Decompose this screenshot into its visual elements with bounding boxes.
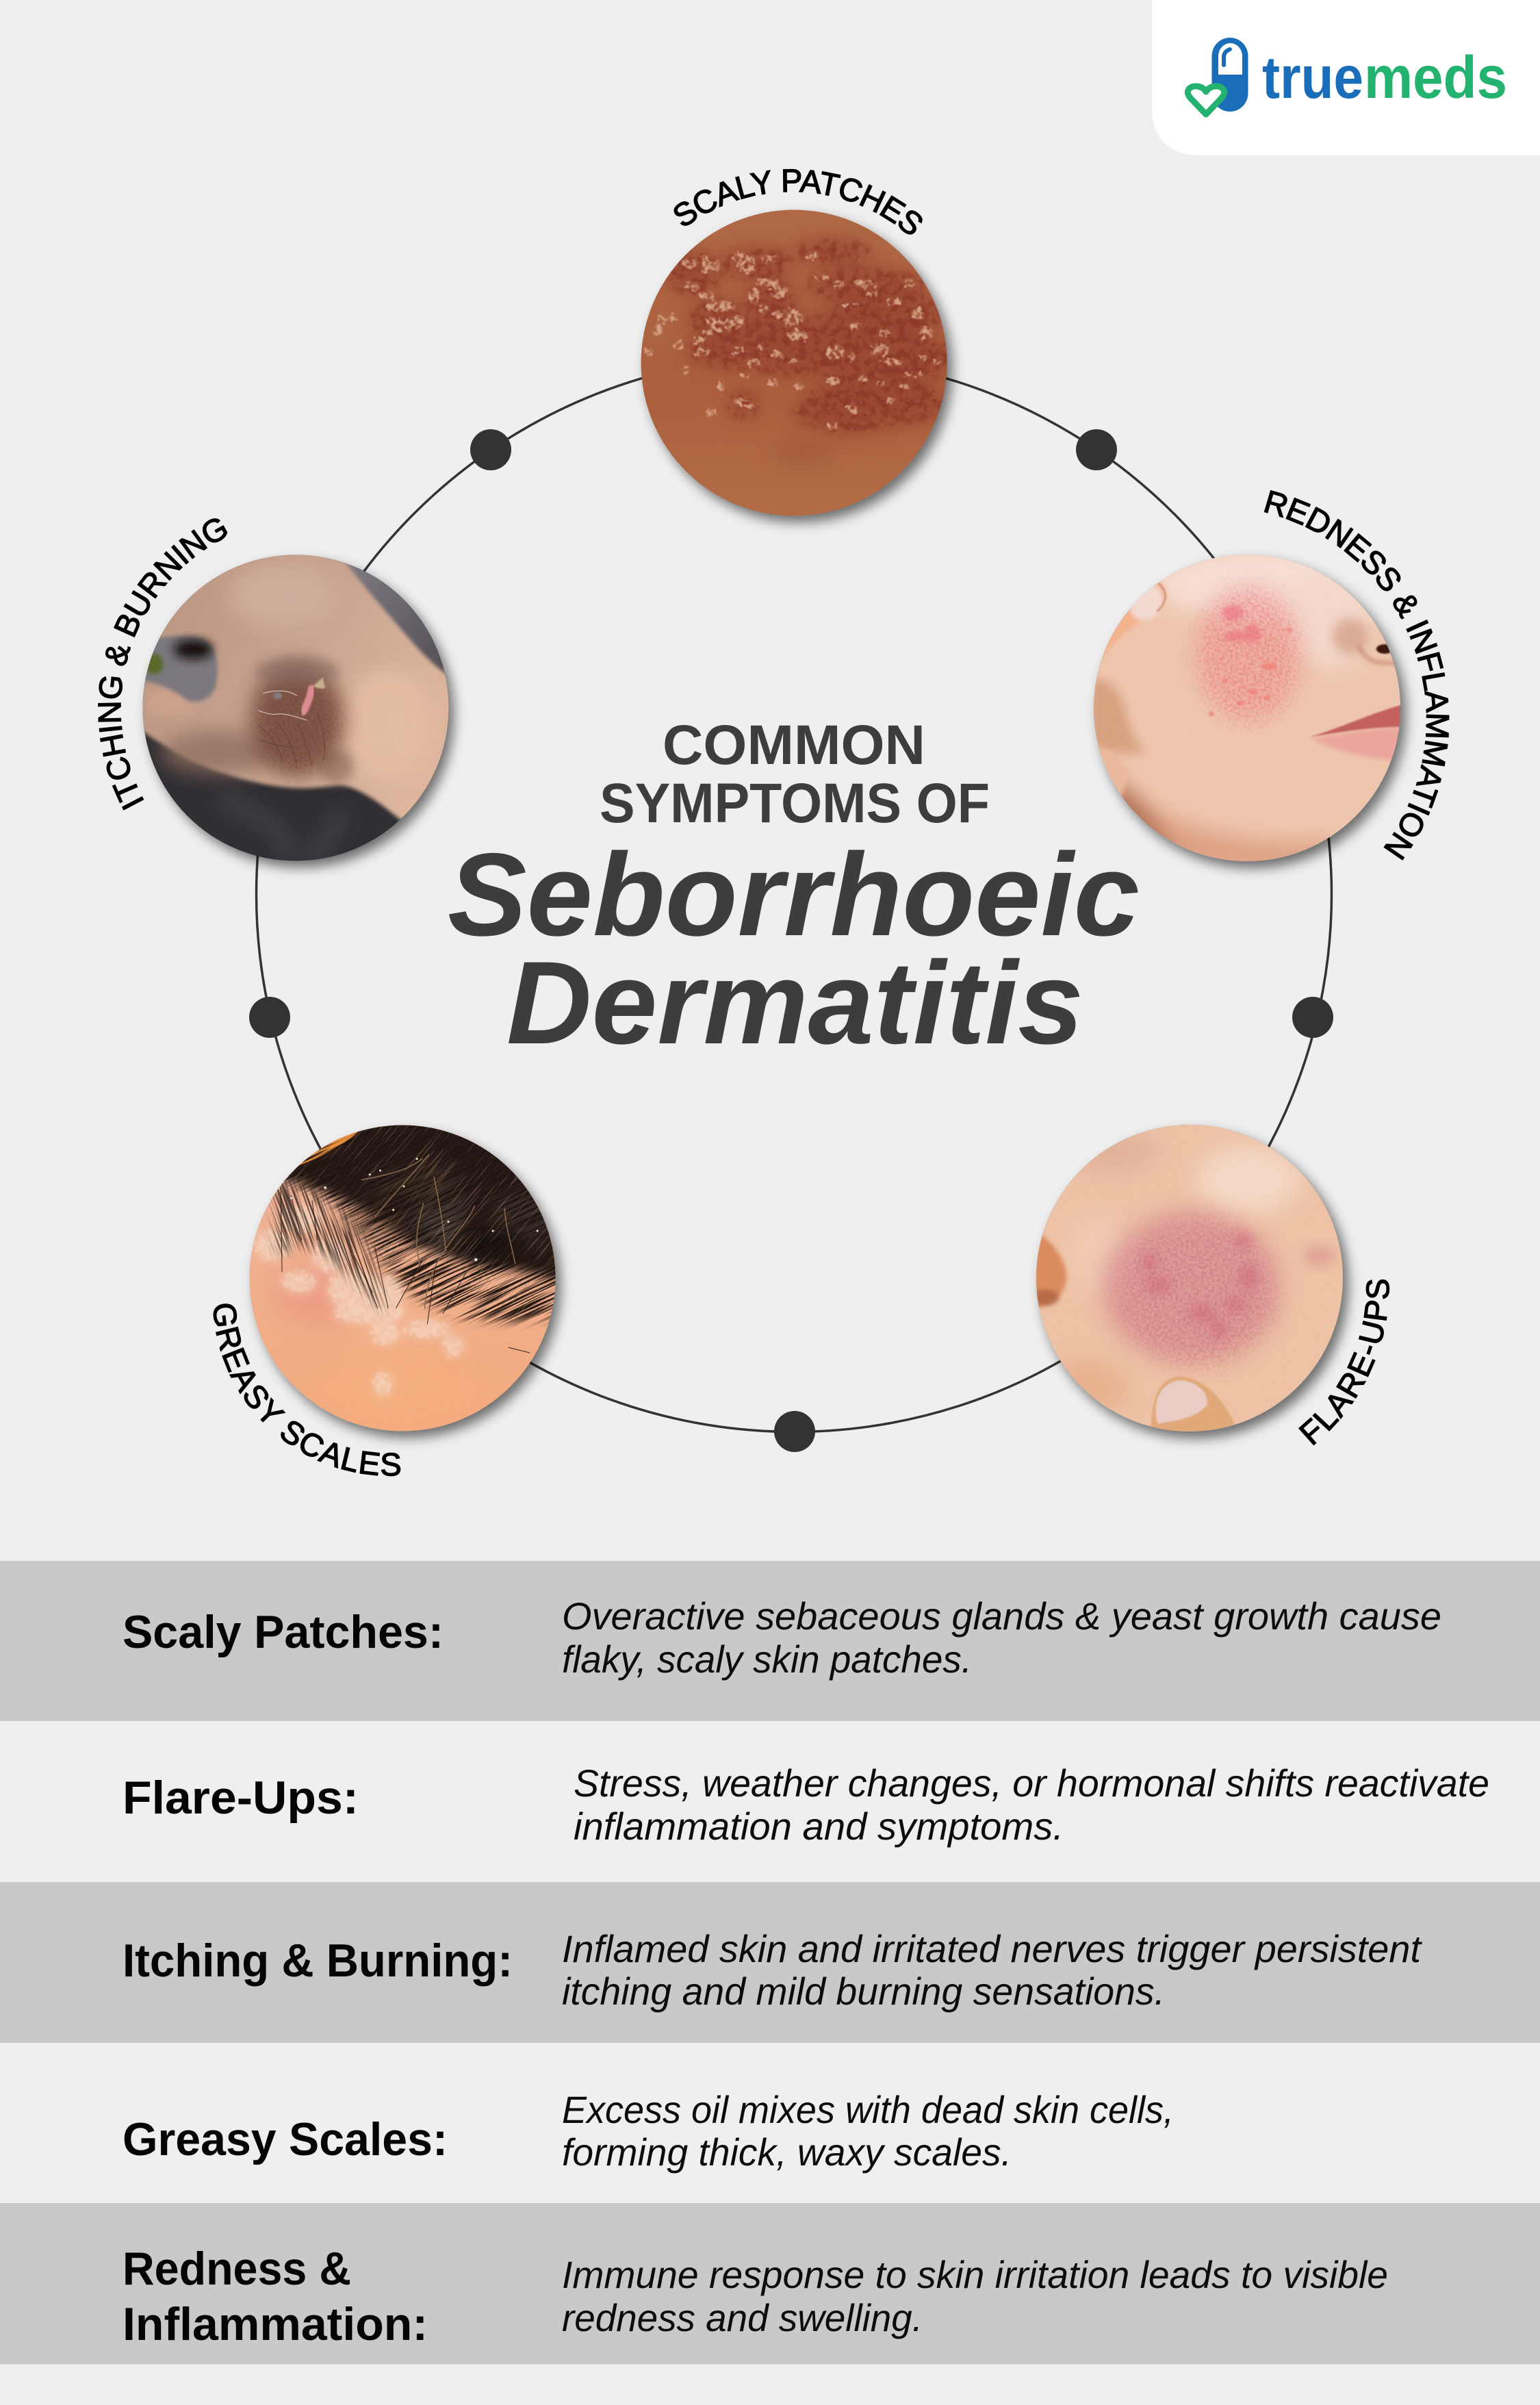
curved label: flare-ups: FLARE-UPS — [1298, 1279, 1389, 1446]
row: flare-ups — [123, 1761, 1489, 1848]
row description: itching and mild burning sensations. — [562, 1970, 1165, 2013]
logo background tab — [1152, 0, 1540, 155]
row band — [0, 1882, 1540, 2043]
photo: greasy scales — [246, 1123, 569, 1446]
row heading — [123, 2243, 428, 2350]
row description — [562, 1927, 1422, 2013]
ring connecting symptoms — [249, 356, 1333, 1452]
row band — [0, 2203, 1540, 2365]
row description: Stress, weather changes, or hormonal shifts reactivate — [574, 1761, 1489, 1805]
photo: itching and burning — [140, 553, 463, 876]
icon: capsule with heart — [1188, 38, 1248, 114]
row heading: Itching & Burning: — [123, 1935, 513, 1987]
curved label: itching and burning: ITCHING & BURNING — [98, 518, 227, 811]
row description — [574, 1761, 1489, 1848]
photo: scaly patches — [630, 199, 958, 525]
logo wordmark: meds — [1364, 44, 1507, 111]
row description: Inflamed skin and irritated nerves trigger persistent — [562, 1927, 1422, 1970]
row description: forming thick, waxy scales. — [562, 2130, 1012, 2174]
row band — [0, 1561, 1540, 1721]
curved label: greasy scales: GREASY SCALES — [214, 1303, 401, 1476]
row description — [562, 2253, 1388, 2339]
logo wordmark: true — [1262, 44, 1363, 111]
row description: Excess oil mixes with dead skin cells, — [562, 2088, 1174, 2131]
row description — [562, 2088, 1174, 2174]
logo panel: truemeds — [1152, 0, 1540, 155]
row: redness and inflammation — [0, 2203, 1540, 2365]
row description: flaky, scaly skin patches. — [562, 1638, 972, 1681]
row description: inflammation and symptoms. — [574, 1805, 1064, 1848]
row description: Immune response to skin irritation leads to visible — [562, 2253, 1388, 2296]
row heading: Inflammation: — [123, 2298, 428, 2350]
title kicker: SYMPTOMS OF — [600, 772, 990, 835]
title kicker — [600, 714, 990, 835]
row description: redness and swelling. — [562, 2296, 923, 2339]
photo: redness and inflammation — [1089, 548, 1409, 872]
title main: Seborrhoeic — [448, 829, 1140, 960]
title — [448, 714, 1140, 1069]
row description — [562, 1594, 1441, 1681]
title main — [448, 829, 1140, 1069]
row heading: Flare-Ups: — [123, 1772, 359, 1824]
row heading: Greasy Scales: — [123, 2113, 448, 2165]
title kicker: COMMON — [663, 714, 925, 776]
row: scaly patches — [0, 1561, 1540, 1721]
row: itching and burning — [0, 1882, 1540, 2043]
row description: Overactive sebaceous glands & yeast growth cause — [562, 1594, 1441, 1638]
row: greasy scales — [123, 2088, 1174, 2174]
photo: flare-ups — [1031, 1119, 1348, 1439]
curved label: redness and inflammation: REDNESS & INFLAMMATION — [1263, 490, 1450, 861]
row heading: Redness & — [123, 2243, 351, 2295]
row heading: Scaly Patches: — [123, 1606, 444, 1658]
curved label: scaly patches: SCALY PATCHES — [673, 168, 923, 235]
title main: Dermatitis — [506, 937, 1083, 1069]
